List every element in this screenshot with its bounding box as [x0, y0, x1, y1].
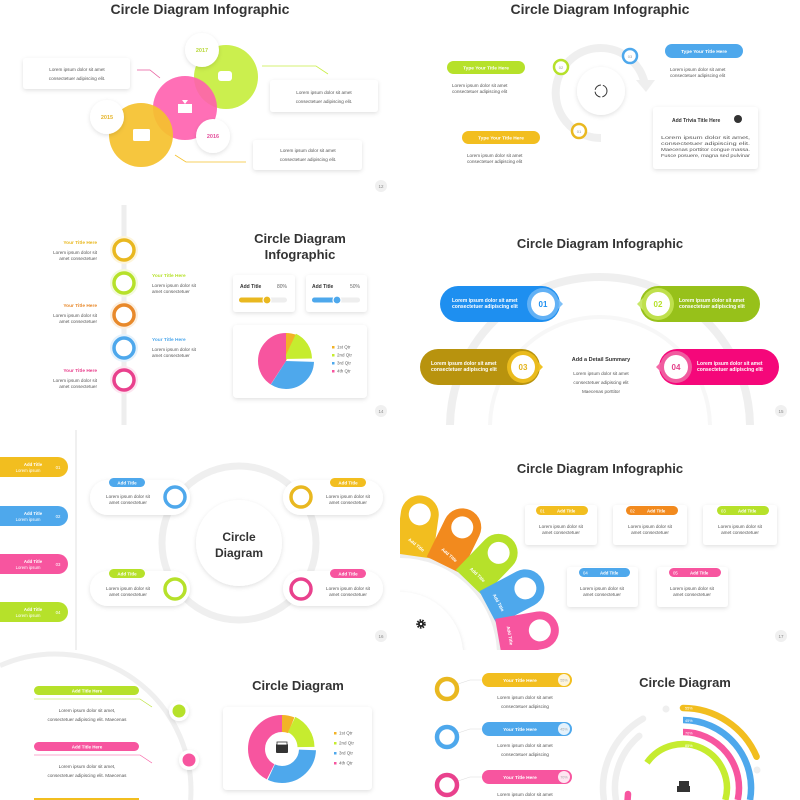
pills — [447, 44, 743, 144]
slide 6: fan petals: Add Title — [557, 508, 576, 514]
circle: green 2017 — [194, 45, 258, 109]
sidebar tabs: 01 — [56, 465, 61, 470]
list rows: Your Title Here — [503, 775, 537, 781]
slide 6: fan petals: 01 — [540, 508, 545, 514]
timeline texts: Your Title Here — [63, 368, 97, 374]
petal pink — [495, 611, 559, 650]
arches — [446, 273, 754, 425]
pill 01: 01 — [539, 300, 548, 309]
list rows: Lorem ipsum dolor sit amet — [497, 743, 553, 748]
petal green: Add Title — [469, 566, 486, 584]
donut chart card: 2nd Qtr — [339, 740, 355, 746]
slide 6: fan petals: 02 — [630, 508, 635, 514]
title: Circle Diagram Infographic — [111, 1, 290, 17]
slide 7: arc list + donut — [0, 654, 372, 800]
slide 2: cycle arrow: 02 — [559, 65, 564, 70]
pill 01 — [440, 286, 563, 322]
donut chart card: 4th Qtr — [339, 760, 353, 766]
pie chart card — [233, 325, 367, 398]
slide 6: fan petals: Add Title — [738, 508, 757, 514]
list rows: Your Title Here — [503, 678, 537, 684]
title: Circle Diagram — [252, 678, 344, 693]
page number — [375, 405, 387, 417]
slide 2: cycle arrow: Type Your Title Here — [478, 136, 524, 142]
slide 6: fan petals: Lorem ipsum dolor sit — [670, 586, 715, 591]
pill 02: consectetuer adipiscing elit — [679, 304, 745, 310]
slide 2: cycle arrow: Type Your Title Here — [463, 66, 509, 72]
timeline texts: Lorem ipsum dolor sit — [152, 283, 197, 288]
sidebar tabs: Add Title — [24, 607, 43, 612]
slide 5: circle with four cards: Lorem ipsum dolor sit — [326, 494, 371, 499]
fan — [400, 495, 559, 650]
slide 1: overlapping circles — [23, 1, 387, 192]
list items — [34, 686, 152, 800]
timeline texts: amet consectetuer — [152, 353, 190, 358]
connector lines — [137, 66, 328, 162]
page number — [775, 630, 787, 642]
trivia card: Maecenas porttitor congue massa. — [661, 147, 750, 152]
slide 6: fan petals: Lorem ipsum dolor sit — [628, 524, 673, 529]
year badges — [90, 33, 230, 153]
trivia card: Lorem ipsum dolor sit amet, — [661, 135, 750, 140]
slide 6: fan petals: Lorem ipsum dolor sit — [539, 524, 584, 529]
pill 03: Lorem ipsum dolor sit amet — [431, 361, 497, 367]
slide 6: fan petals: 04 — [583, 570, 588, 576]
ring — [162, 466, 316, 620]
pill 04: Lorem ipsum dolor sit amet — [697, 361, 763, 367]
slide 1: overlapping circles: 2016 — [207, 134, 219, 140]
timeline texts: Lorem ipsum dolor sit — [53, 313, 98, 318]
slide 5: circle with four cards: Lorem ipsum dolor sit — [106, 586, 151, 591]
page number — [375, 630, 387, 642]
pie chart card: 1st Qtr — [337, 344, 351, 350]
timeline bar — [122, 205, 126, 425]
slide 6: fan petals: Add Title — [690, 570, 709, 576]
slide 6: fan petals: Lorem ipsum dolor sit — [580, 586, 625, 591]
slider cards: Add Title — [312, 284, 334, 290]
list rows: Your Title Here — [503, 727, 537, 733]
circle: pink — [153, 76, 217, 140]
pill 02 — [637, 286, 760, 322]
slide 6: fan petals: amet consectetuer — [721, 530, 759, 535]
slide 5: circle with four cards: amet consectetuer — [109, 500, 147, 505]
arcs chart — [603, 708, 757, 800]
slide 8: progress arcs — [437, 673, 760, 800]
pill 01: Lorem ipsum dolor sit amet — [452, 298, 518, 304]
center icon — [661, 766, 705, 800]
slide 1: overlapping circles: Lorem ipsum dolor sit amet — [296, 90, 352, 95]
trivia card: consectetuer adipiscing elit. — [661, 141, 750, 146]
slide 4: arch with pills — [420, 238, 787, 425]
timeline texts: Lorem ipsum dolor sit — [53, 378, 98, 383]
slide 5: circle with four cards: Add Title — [338, 480, 358, 486]
slide 2: cycle arrow: 01 — [577, 129, 582, 134]
title: Circle Diagram Infographic — [517, 236, 683, 251]
donut chart card: 1st Qtr — [339, 730, 353, 736]
title: Infographic — [265, 247, 335, 262]
circle: yellow 2015 — [109, 103, 173, 167]
slide 2: cycle arrow: Lorem ipsum dolor sit amet — [670, 67, 726, 72]
title: Circle Diagram Infographic — [511, 1, 690, 17]
page number: 17 — [778, 634, 784, 639]
timeline texts: Your Title Here — [63, 303, 97, 309]
petal blue: Add Title — [492, 593, 505, 613]
list items: consectetuer adipiscing elit. Maecenas — [48, 773, 127, 778]
slide 2: cycle arrow: consectetuer adipiscing elit — [467, 159, 523, 164]
slide 2: cycle arrow: consectetuer adipiscing elit — [452, 89, 508, 94]
sidebar tabs: Lorem ipsum — [16, 468, 41, 473]
list rows: 70% — [560, 776, 568, 780]
arc — [0, 654, 191, 800]
sidebar divider — [75, 430, 77, 650]
page number: 15 — [778, 409, 784, 414]
sidebar tabs: 04 — [56, 610, 61, 615]
trivia card: Fusce posuere, magna sed pulvinar — [661, 153, 751, 158]
detail summary: consectetuer adipiscing elit — [573, 380, 629, 385]
slide 8: progress arcs: 55% — [685, 706, 693, 710]
slide 2: cycle arrow — [447, 1, 758, 169]
slide 2: cycle arrow: Lorem ipsum dolor sit amet — [467, 153, 523, 158]
center circle: Diagram — [215, 546, 263, 560]
slide 5: circle with four cards: Add Title — [338, 572, 358, 576]
pie chart card: 3rd Qtr — [337, 360, 352, 366]
slide 1: overlapping circles: Lorem ipsum dolor sit amet — [49, 67, 105, 72]
list rows: consectetuer adipiscing — [501, 752, 549, 757]
sidebar tabs: Lorem ipsum — [16, 613, 41, 618]
trivia card — [653, 107, 758, 169]
sidebar tabs: Add Title — [24, 559, 43, 564]
text boxes — [23, 58, 378, 170]
detail summary: Maecenas porttitor — [582, 389, 620, 394]
list items: consectetuer adipiscing elit. Maecenas — [48, 717, 127, 722]
slide 5: circle with four cards — [0, 430, 387, 650]
pill 03: 03 — [519, 363, 528, 372]
sidebar tabs: 03 — [56, 562, 61, 567]
timeline texts: amet consectetuer — [59, 319, 97, 324]
timeline texts: Your Title Here — [152, 337, 186, 343]
timeline texts: amet consectetuer — [59, 384, 97, 389]
page number — [375, 180, 387, 192]
title — [254, 231, 346, 262]
slide 6: fan petals: amet consectetuer — [583, 592, 621, 597]
slide 3: vertical timeline + charts — [53, 205, 387, 425]
slide 1: overlapping circles: consectetuer adipiscing elit. — [280, 157, 336, 162]
pie chart card: 2nd Qtr — [337, 352, 353, 358]
list rows: 45% — [560, 728, 568, 732]
pill 03 — [420, 349, 543, 385]
detail summary — [572, 357, 631, 394]
list items: Lorem ipsum dolor sit amet, — [59, 708, 115, 713]
list rows: consectetuer adipiscing — [501, 704, 549, 709]
petal green — [456, 534, 518, 594]
slide 6: fan petals: amet consectetuer — [673, 592, 711, 597]
slide 1: overlapping circles: consectetuer adipiscing elit. — [49, 76, 105, 81]
petal yellow: Add Title — [407, 537, 426, 553]
pill 01: consectetuer adipiscing elit — [452, 304, 518, 310]
slider cards — [233, 275, 367, 312]
sidebar tabs: 02 — [56, 514, 61, 519]
timeline texts: Your Title Here — [152, 273, 186, 279]
center refresh icon — [577, 67, 625, 115]
slide 6: fan petals: 03 — [721, 508, 726, 514]
petal orange: Add Title — [440, 547, 458, 563]
slide 1: overlapping circles: 2017 — [196, 48, 208, 54]
slide 6: fan petals: Lorem ipsum dolor sit — [718, 524, 763, 529]
slide 6: fan petals: 05 — [673, 570, 678, 576]
list items: Lorem ipsum dolor sit amet, — [59, 764, 115, 769]
title: Circle Diagram — [639, 675, 731, 690]
pill 02: Lorem ipsum dolor sit amet — [679, 298, 745, 304]
sidebar tabs: Add Title — [24, 511, 43, 516]
center circle: Circle — [222, 530, 256, 544]
slide 1: overlapping circles: consectetuer adipiscing elit. — [296, 99, 352, 104]
petal pink: Add Title — [506, 626, 514, 646]
slide 2: cycle arrow: Type Your Title Here — [681, 49, 727, 55]
cards — [90, 480, 383, 606]
slide 8: progress arcs: 45% — [685, 719, 693, 723]
list rows: 55% — [560, 678, 568, 682]
slide 8: progress arcs: 85% — [685, 744, 693, 748]
slide 5: circle with four cards: Add Title — [117, 480, 137, 486]
list rows: Lorem ipsum dolor sit amet — [497, 695, 553, 700]
sidebar tabs: Add Title — [24, 462, 43, 467]
sidebar tabs — [0, 457, 68, 622]
step badges — [554, 49, 637, 138]
list items: Add Title Here — [72, 688, 103, 694]
list rows — [437, 673, 572, 797]
center circle — [196, 500, 282, 586]
timeline texts: Your Title Here — [63, 240, 97, 246]
slider cards: Add Title — [240, 284, 262, 290]
slide 2: cycle arrow: 03 — [628, 54, 633, 59]
slide 6: fan petals — [400, 464, 787, 650]
petal yellow — [400, 495, 439, 558]
pill 03: consectetuer adipiscing elit — [431, 367, 497, 373]
petal orange — [426, 508, 482, 572]
slide 5: circle with four cards: Add Title — [117, 572, 137, 576]
donut chart card: 3rd Qtr — [339, 750, 354, 756]
page number: 16 — [378, 634, 384, 639]
slide 6: fan petals: Add Title — [600, 570, 619, 576]
title: Circle Diagram Infographic — [517, 461, 683, 476]
slide 5: circle with four cards: amet consectetuer — [109, 592, 147, 597]
slide 6: fan petals: amet consectetuer — [542, 530, 580, 535]
title: Circle Diagram — [254, 231, 346, 246]
slide 1: overlapping circles: 2015 — [101, 115, 113, 121]
timeline nodes — [110, 236, 138, 394]
slide 6: fan petals: Add Title — [647, 508, 666, 514]
timeline texts: amet consectetuer — [152, 289, 190, 294]
page number: 12 — [378, 184, 384, 189]
sidebar tabs: Lorem ipsum — [16, 517, 41, 522]
slide 5: circle with four cards: Lorem ipsum dolor sit — [106, 494, 151, 499]
timeline texts: Lorem ipsum dolor sit — [53, 250, 98, 255]
icon: gear — [418, 620, 424, 628]
slider cards: 50% — [350, 284, 361, 290]
slide 5: circle with four cards: amet consectetuer — [329, 500, 367, 505]
detail summary: Add a Detail Summary — [572, 357, 631, 363]
page number: 14 — [378, 409, 384, 414]
pie chart card: 4th Qtr — [337, 368, 351, 374]
petal blue — [479, 569, 544, 622]
donut chart card — [223, 707, 372, 790]
list rows: Lorem ipsum dolor sit amet — [497, 792, 553, 797]
pill 02: 02 — [654, 300, 663, 309]
cards — [525, 505, 777, 607]
timeline texts: amet consectetuer — [59, 256, 97, 261]
slide 5: circle with four cards: amet consectetuer — [329, 592, 367, 597]
slide 6: fan petals: amet consectetuer — [631, 530, 669, 535]
detail summary: Lorem ipsum dolor sit amet — [573, 371, 629, 376]
timeline texts: Lorem ipsum dolor sit — [152, 347, 197, 352]
page number — [775, 405, 787, 417]
slide 1: overlapping circles: Lorem ipsum dolor sit amet — [280, 148, 336, 153]
slide 2: cycle arrow: Lorem ipsum dolor sit amet — [452, 83, 508, 88]
pill 04: 04 — [672, 363, 681, 372]
slide 5: circle with four cards: Lorem ipsum dolor sit — [326, 586, 371, 591]
timeline texts — [53, 240, 197, 389]
slider cards: 80% — [277, 284, 288, 290]
pill 04: consectetuer adipiscing elit — [697, 367, 763, 373]
trivia card: Add Trivia Title Here — [672, 118, 720, 124]
slide 8: progress arcs: 70% — [685, 732, 693, 736]
slide 2: cycle arrow: consectetuer adipiscing elit — [670, 73, 726, 78]
nodes — [169, 701, 199, 770]
sidebar tabs: Lorem ipsum — [16, 565, 41, 570]
list items: Add Title Here — [72, 744, 103, 750]
cycle ring with arrow — [556, 48, 655, 138]
pill 04 — [656, 349, 779, 385]
